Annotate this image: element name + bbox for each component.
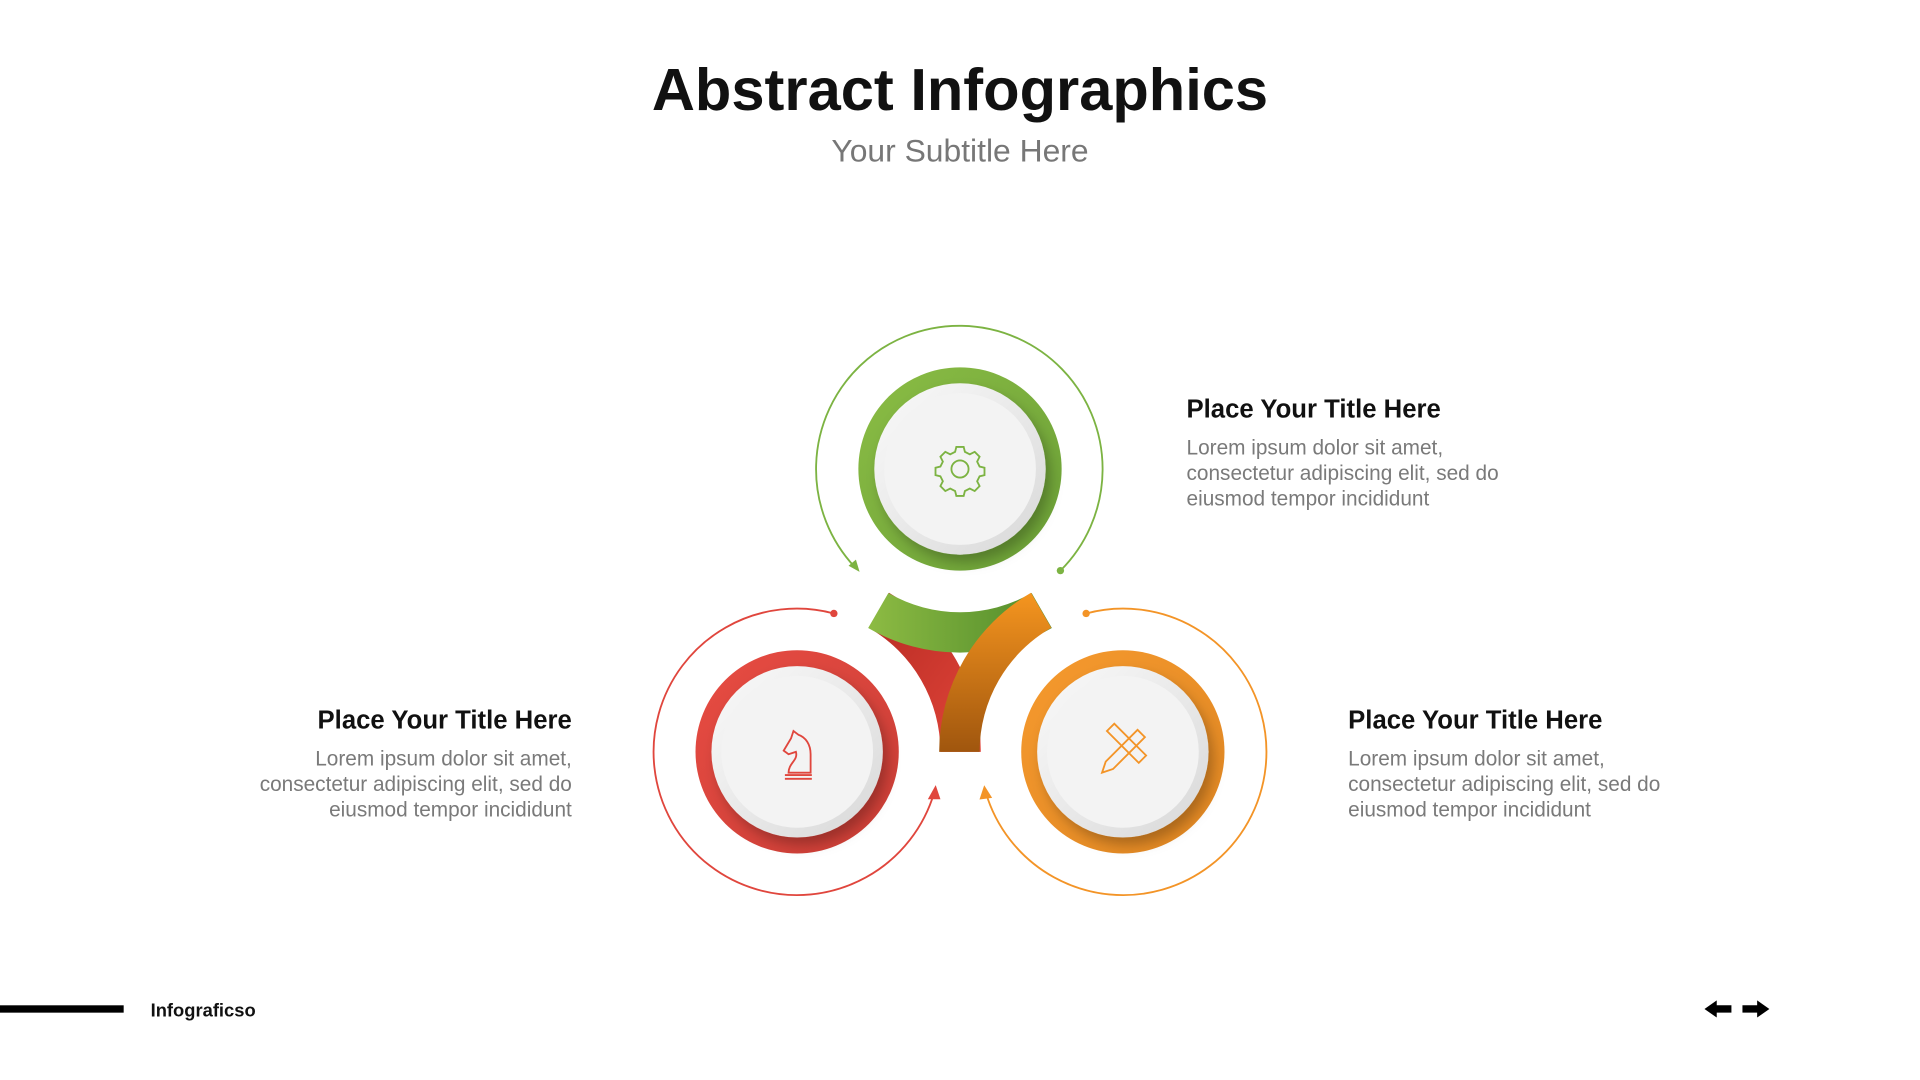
circle: red (chess knight) bbox=[696, 650, 899, 853]
text block: left: eiusmod tempor incididunt bbox=[329, 799, 572, 822]
title: Abstract Infographics bbox=[652, 56, 1268, 123]
nav arrows bbox=[1704, 1000, 1769, 1018]
arc arrow: green bbox=[816, 326, 1103, 574]
text block: top right: eiusmod tempor incididunt bbox=[1187, 488, 1430, 511]
text block: right: eiusmod tempor incididunt bbox=[1348, 799, 1591, 822]
text block: right: Place Your Title Here bbox=[1348, 707, 1602, 735]
text block: top right: Place Your Title Here bbox=[1187, 396, 1441, 424]
arc arrow: red bbox=[654, 609, 939, 895]
text block: top right: consectetur adipiscing elit, sed do bbox=[1187, 462, 1499, 485]
icon: knight bbox=[784, 731, 812, 779]
text block: right: consectetur adipiscing elit, sed do bbox=[1348, 773, 1660, 796]
subtitle: Your Subtitle Here bbox=[831, 133, 1089, 169]
text block: top right bbox=[1187, 396, 1499, 511]
text block: left: Place Your Title Here bbox=[318, 707, 572, 735]
arc arrow: orange bbox=[981, 609, 1266, 895]
center connector shape bbox=[868, 593, 1052, 752]
icon: gear bbox=[936, 447, 984, 496]
text block: right bbox=[1348, 707, 1660, 822]
text block: right: Lorem ipsum dolor sit amet, bbox=[1348, 747, 1605, 770]
footer brand: Infograficso bbox=[151, 999, 256, 1020]
circle: green (gear) bbox=[858, 367, 1062, 571]
text block: top right: Lorem ipsum dolor sit amet, bbox=[1187, 436, 1443, 459]
text block: left bbox=[260, 707, 572, 822]
icon: pencil ruler bbox=[1102, 724, 1146, 773]
text block: left: consectetur adipiscing elit, sed do bbox=[260, 773, 572, 796]
text block: left: Lorem ipsum dolor sit amet, bbox=[315, 747, 572, 770]
circle: orange (pencil & ruler) bbox=[1021, 650, 1224, 853]
footer bar bbox=[0, 1005, 124, 1013]
